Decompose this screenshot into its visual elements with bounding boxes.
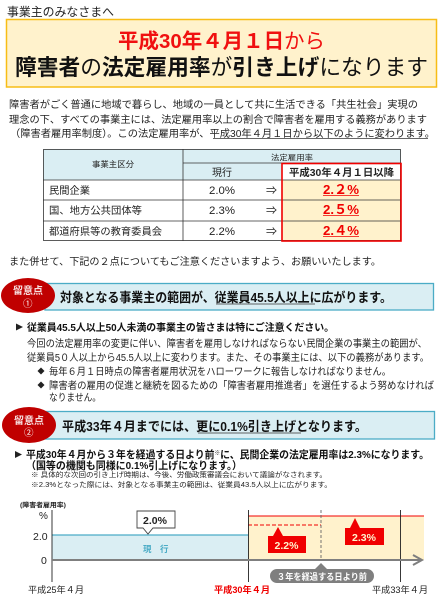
point 1 badge	[1, 278, 55, 313]
chart: y-axis labels: 0	[41, 555, 47, 567]
x-axis labels	[28, 584, 428, 595]
rate table: ⇒	[266, 185, 277, 197]
point 1 heading bar: 対象となる事業主の範囲が、従業員45.5人以上に広がります。	[60, 290, 392, 305]
rate table: 2.２%	[323, 182, 359, 197]
rate table: 平成30年４月１日以降	[289, 166, 394, 179]
callout: 2.0%: 2.0%	[143, 515, 168, 527]
point 2 badge: 留意点	[14, 414, 44, 427]
rate table: 法定雇用率	[271, 152, 314, 162]
intro paragraph: （障害者雇用率制度）。この法定雇用率が、平成30年４月１日から以下のように変わります。	[10, 127, 435, 140]
x-axis labels: 平成30年４月	[214, 584, 270, 595]
point 1 details: 毎年６月１日時点の障害者雇用状況をハローワークに報告しなければなりません。	[49, 365, 391, 378]
point 2 badge	[2, 407, 56, 443]
pill: before three years elapse: ３年を経過する日より前	[277, 571, 367, 582]
callout: 2.3%: 2.3%	[352, 532, 377, 544]
rate table: ⇒	[266, 226, 277, 238]
point 2 details: （国等の機関も同様に0.1%引上げになります。）	[26, 459, 242, 472]
point 2 details: ※	[215, 450, 220, 457]
callout: 2.3%	[345, 518, 384, 545]
intro paragraph: 理念の下、すべての事業主には、法定雇用率以上の割合で障害者を雇用する義務があります	[9, 113, 427, 126]
callout: 2.2%	[268, 527, 306, 553]
point 2 details: ※ 具体的な次回の引き上げ時期は、今後、労働政策審議会において議論がなされます。	[31, 470, 327, 479]
chart: axes	[52, 510, 422, 582]
rate table	[43, 149, 401, 241]
point 1 details: なりません。	[49, 392, 101, 404]
intro paragraph: 障害者がごく普通に地域で暮らし、地域の一員として共に生活できる「共生社会」実現の	[9, 98, 418, 111]
point 1 details: 今回の法定雇用率の変更に伴い、障害者を雇用しなければならない民間企業の事業主の範囲が、	[27, 337, 427, 350]
greeting heading: 事業主のみなさまへ	[7, 5, 114, 19]
rate table: 2.3%	[209, 205, 235, 217]
title banner	[6, 20, 436, 87]
rate table: 2.５%	[323, 202, 359, 217]
chart: y-axis labels: (障害者雇用率)	[20, 500, 66, 509]
rate table: 国、地方公共団体等	[49, 204, 142, 217]
chart: y-axis labels: %	[39, 511, 48, 522]
point 1 heading bar	[45, 284, 434, 310]
point 2 details: ※2.3%となった際には、対象となる事業主の範囲は、従業員43.5人以上に広がります。	[31, 480, 332, 489]
point 2 heading bar: 平成33年４月までには、更に0.1%引き上げとなります。	[62, 419, 367, 434]
rate table: 現行	[212, 166, 232, 179]
point 1 details: 従業員45.5人以上50人未満の事業主の皆さまは特にご注意ください。	[27, 321, 334, 334]
notice sentence: また併せて、下記の２点についてもご注意くださいますよう、お願いいたします。	[9, 255, 381, 268]
point 2 heading bar	[45, 412, 434, 439]
x-axis labels: 平成25年４月	[28, 584, 84, 595]
point 2 details	[15, 448, 429, 489]
chart: y-axis labels	[20, 500, 66, 567]
pill: before three years elapse	[270, 563, 374, 583]
point 1 badge: 留意点	[13, 284, 43, 297]
title banner: 障害者の法定雇用率が引き上げになります	[15, 55, 428, 80]
rate table: 2.４%	[323, 223, 359, 238]
chart: current rate area: 現	[143, 544, 152, 554]
rate table: 事業主区分	[92, 159, 134, 169]
rate table: ⇒	[266, 205, 277, 217]
chart: current rate area	[52, 535, 248, 560]
callout: 2.0%	[137, 511, 175, 534]
point 1 badge: ①	[23, 299, 33, 310]
rate table: 民間企業	[49, 184, 90, 197]
rate table: 2.2%	[209, 226, 235, 238]
chart: y-axis labels: 2.0	[33, 531, 48, 543]
point 2 details: 平成30年４月から３年を経過する日より前	[26, 449, 226, 461]
point 2 details: に、民間企業の法定雇用率は2.3%になります。	[220, 448, 429, 461]
rate table: 都道府県等の教育委員会	[49, 225, 162, 238]
x-axis labels: 平成33年４月	[372, 584, 428, 595]
chart: new rate area	[248, 516, 424, 560]
intro paragraph	[9, 98, 435, 140]
title banner: 平成30年４月１日から	[118, 29, 325, 53]
callout: 2.2%: 2.2%	[274, 540, 299, 552]
point 2 badge: ②	[24, 428, 34, 439]
point 1 details	[16, 321, 434, 404]
rate table: 2.0%	[209, 185, 235, 197]
chart: current rate area: 行	[160, 544, 169, 554]
timeline chart	[20, 500, 428, 595]
